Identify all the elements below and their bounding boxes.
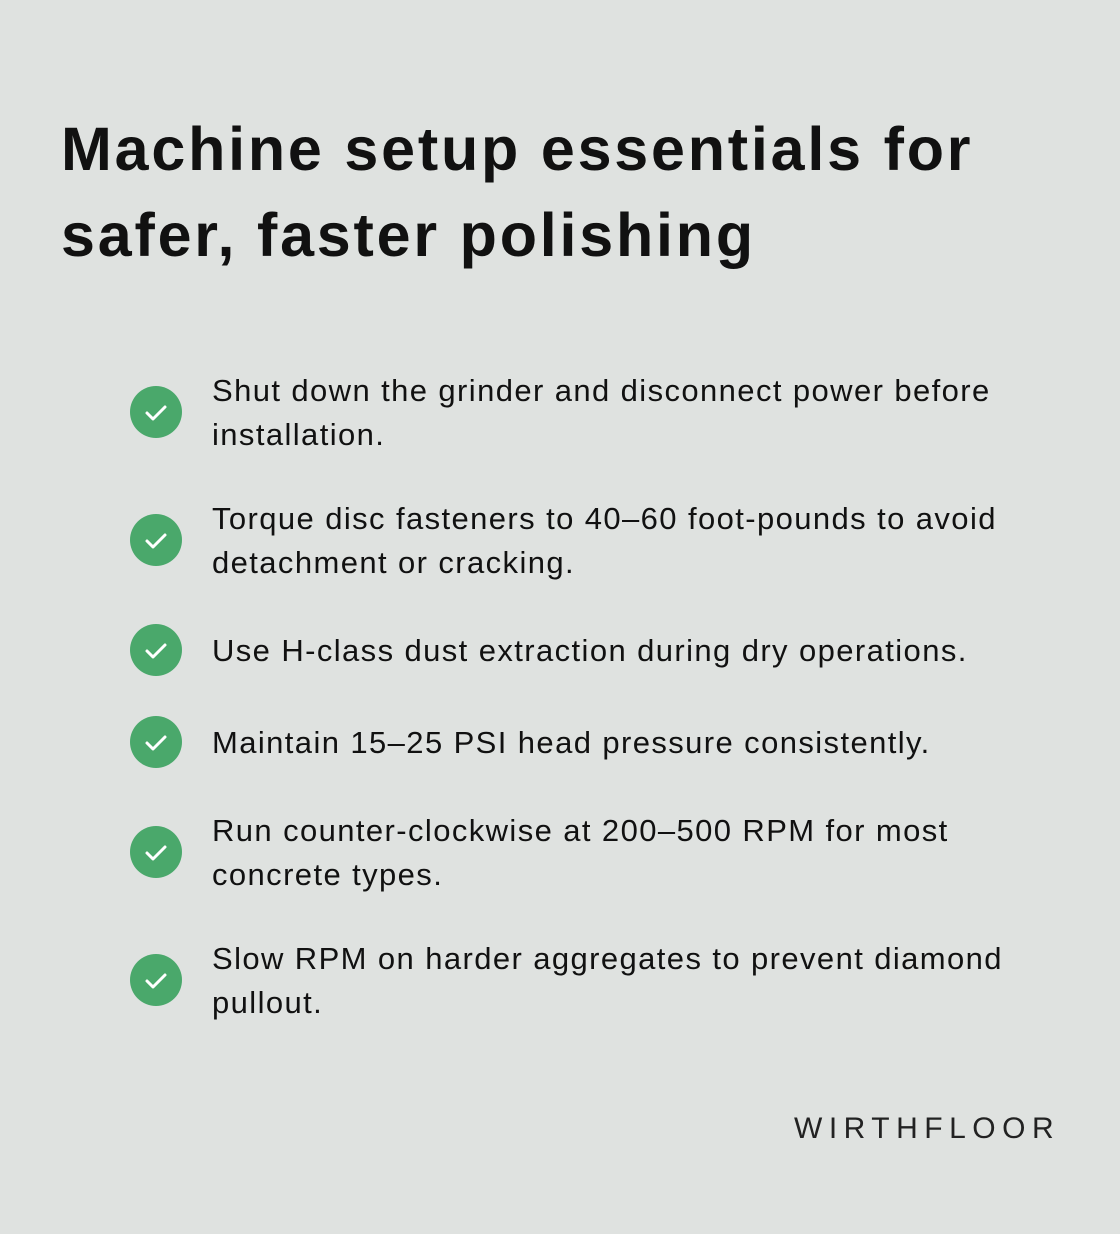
item 2: Torque disc fasteners to 40–60 foot-pounds to avoid	[212, 501, 997, 536]
item 5	[212, 813, 949, 892]
item 6	[212, 941, 1003, 1020]
icon: check 6	[130, 954, 182, 1006]
item 1	[212, 373, 991, 452]
item 4: Maintain 15–25 PSI head pressure consistently.	[212, 725, 931, 760]
item 6: pullout.	[212, 985, 323, 1020]
item 5: Run counter-clockwise at 200–500 RPM for most	[212, 813, 949, 848]
title	[61, 115, 973, 269]
checklist	[130, 373, 1003, 1020]
icon: check 1	[130, 386, 182, 438]
item 6: Slow RPM on harder aggregates to prevent diamond	[212, 941, 1003, 976]
item 1: installation.	[212, 417, 385, 452]
item 5: concrete types.	[212, 857, 443, 892]
logo: WIRTHFLOOR	[794, 1112, 1060, 1145]
item 2	[212, 501, 997, 580]
icon: check 3	[130, 624, 182, 676]
icon: check 2	[130, 514, 182, 566]
icon: check 4	[130, 716, 182, 768]
item 1: Shut down the grinder and disconnect power before	[212, 373, 991, 408]
item 2: detachment or cracking.	[212, 545, 575, 580]
icon: check 5	[130, 826, 182, 878]
title: Machine setup essentials for	[61, 115, 973, 183]
title: safer, faster polishing	[61, 201, 756, 269]
item 3: Use H-class dust extraction during dry operations.	[212, 633, 968, 668]
